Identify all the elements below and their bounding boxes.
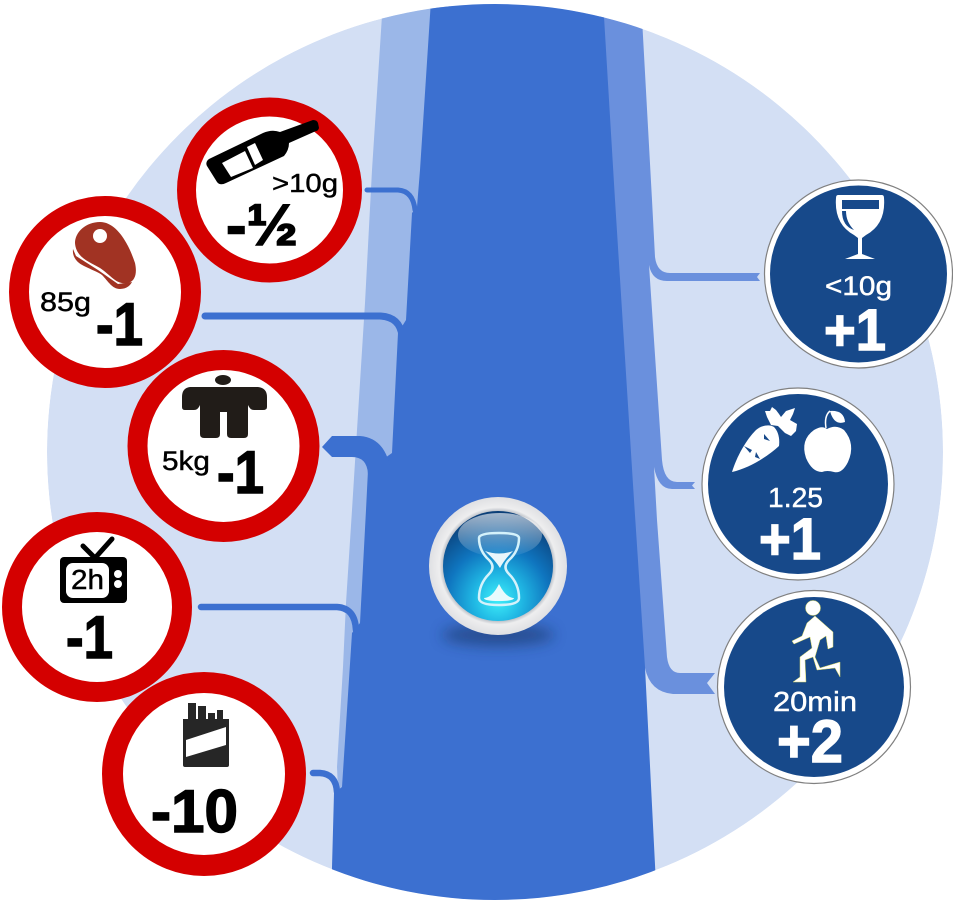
badge: bottle over 10g — [186, 107, 352, 273]
label: 85g — [40, 287, 91, 317]
hourglass button — [429, 497, 567, 646]
icon: steak — [73, 222, 136, 289]
icon: apple — [804, 411, 851, 472]
connector: bottle — [367, 190, 415, 210]
value: -10 — [151, 778, 238, 845]
label: 20min — [773, 686, 857, 717]
label: <10g — [825, 271, 892, 301]
icon: runner — [792, 600, 840, 682]
icon: carrot — [732, 407, 797, 472]
badge: running 20min — [718, 590, 910, 784]
badge: cigarettes — [112, 682, 296, 866]
value: -1 — [66, 604, 113, 671]
central dark band — [331, 0, 657, 904]
value: -1 — [96, 291, 143, 358]
icon: television — [60, 539, 127, 603]
label: >10g — [272, 168, 338, 198]
icon: body — [182, 375, 267, 438]
label: 5kg — [162, 446, 210, 476]
badge: wine under 10g — [764, 180, 952, 368]
badge: weight 5kg — [138, 360, 310, 532]
connector: meat — [205, 316, 402, 336]
connector: cigarettes — [313, 773, 337, 792]
connector arrow: weight — [322, 436, 391, 474]
left light band — [337, 0, 450, 790]
badge: fruit and vegetables — [702, 388, 894, 580]
icon: cigarette pack — [183, 703, 229, 767]
right mid band with wine, vegetable and running connectors — [600, 0, 760, 694]
value: +2 — [777, 708, 843, 775]
value: -½ — [226, 193, 298, 258]
button shadow — [442, 624, 554, 646]
badge: tv 2h — [12, 522, 182, 692]
icon: television: 2h — [71, 564, 104, 595]
label: 1.25 — [768, 482, 823, 513]
icon: wine bottle — [206, 120, 319, 184]
value: +1 — [759, 507, 821, 572]
value: -1 — [217, 439, 264, 506]
icon: hourglass — [479, 533, 519, 605]
connector: tv — [201, 607, 356, 630]
badge: meat 85g — [19, 206, 191, 378]
value: +1 — [824, 298, 886, 363]
icon: wine glass — [836, 195, 884, 259]
